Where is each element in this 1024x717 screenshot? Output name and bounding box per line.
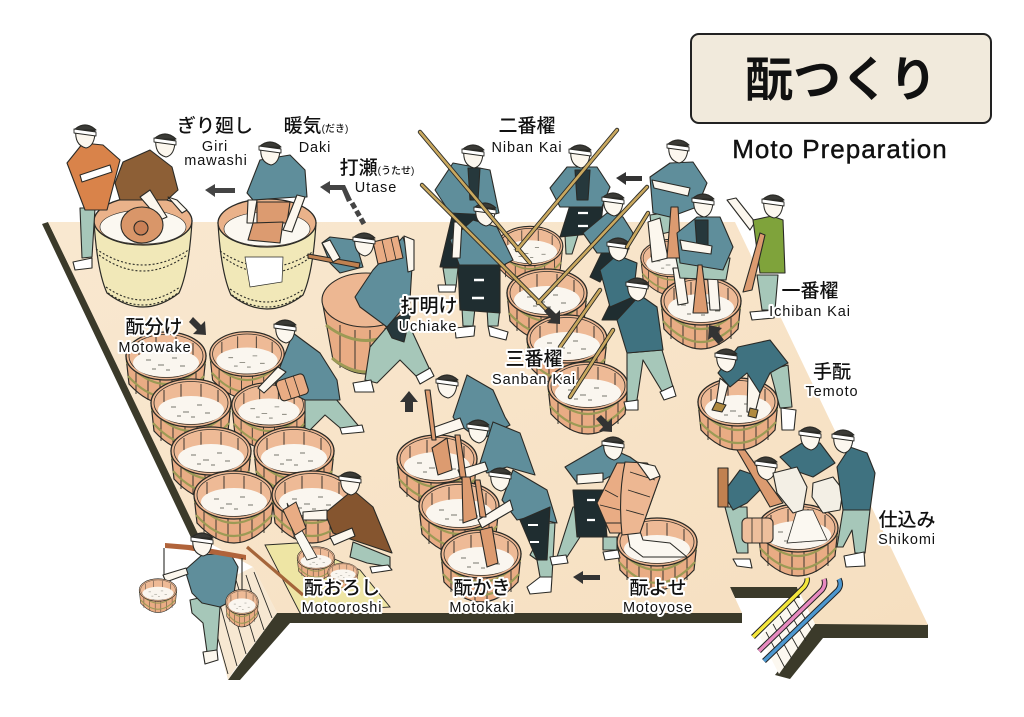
label: Niban Kai: 二番櫂 xyxy=(498,115,556,137)
tub: Uchiake big xyxy=(322,273,410,374)
tilted pail: Utase xyxy=(373,236,403,264)
label: Giri mawashi xyxy=(177,115,253,169)
arrow: Giri mawashi xyxy=(205,184,235,197)
figure: Niban front man xyxy=(450,203,513,340)
subtitle: Moto Preparation xyxy=(732,134,948,164)
tub: Giri mawashi xyxy=(94,197,192,307)
label: Ichiban Kai: Ichiban Kai xyxy=(769,304,851,320)
label: Niban Kai: Niban Kai xyxy=(492,140,562,156)
label: Shikomi: 仕込み xyxy=(878,509,936,531)
label: Motokaki xyxy=(449,577,515,616)
figure: Daki man xyxy=(247,142,307,243)
figure: Motokaki middle man xyxy=(455,420,535,523)
pail: Shikomi xyxy=(742,518,773,543)
label: Motowake: 酛分け xyxy=(125,316,183,338)
figure: Ichiban upper man xyxy=(648,140,707,262)
label: Utase xyxy=(340,157,414,196)
label: Motoyose: 酛よせ xyxy=(629,578,687,599)
label: Motokaki: Motokaki xyxy=(449,600,515,616)
figure: Sanban back man xyxy=(600,238,637,320)
figure: Ichiban seated man xyxy=(673,194,733,313)
label: Temoto: Temoto xyxy=(806,384,858,400)
arrow: Utase xyxy=(320,181,364,224)
wooden vessel in tub: Giri mawashi xyxy=(121,207,163,243)
pail: right bucket xyxy=(226,590,258,627)
label: Motokaki: 酛かき xyxy=(453,577,511,599)
label: Motooroshi xyxy=(302,578,382,616)
label: Uchiake: Uchiake xyxy=(399,319,457,335)
title box: 酛つくり xyxy=(745,54,937,107)
label: Temoto: 手酛 xyxy=(813,361,851,383)
figure: Shikomi right man xyxy=(832,430,875,567)
label: Motowake: Motowake xyxy=(118,340,192,356)
label: Giri mawashi: Giri xyxy=(202,139,228,155)
figure: orange man xyxy=(67,125,120,270)
figure: Niban back man xyxy=(435,145,499,292)
floor platform xyxy=(42,222,928,680)
figure: Utase man xyxy=(308,233,375,273)
label: Motooroshi: 酛おろし xyxy=(304,578,380,599)
arrow: Ichiban to Niban xyxy=(616,172,642,185)
arrow: Sanban to Motoyose xyxy=(596,415,612,432)
label: Shikomi: Shikomi xyxy=(878,532,936,548)
label: Uchiake: 打明け xyxy=(400,295,458,317)
pail: left bucket xyxy=(139,579,177,613)
arrows: coloured flow xyxy=(753,578,840,661)
figure: Uchiake man xyxy=(353,236,434,392)
tilted tub pouring: Motoyose xyxy=(597,462,687,557)
label: Giri mawashi: mawashi xyxy=(184,153,248,169)
figure: Shikomi left man xyxy=(718,450,783,568)
label: Sanban Kai xyxy=(492,348,576,388)
tub: Temoto xyxy=(698,378,778,450)
label: Motoyose xyxy=(623,578,693,616)
figure: Niban right man xyxy=(550,145,610,254)
label: Shikomi xyxy=(878,509,936,548)
figure: Shikomi centre man xyxy=(780,427,835,477)
tubs: Motokaki xyxy=(397,435,521,602)
label: Utase: Utase xyxy=(355,180,397,196)
figure: water carrier xyxy=(163,533,246,664)
figure: green man xyxy=(727,195,785,320)
label: Sanban Kai: 三番櫂 xyxy=(505,348,563,370)
tubs: Niban and Sanban Kai xyxy=(497,226,741,434)
figure: Motokaki upper man xyxy=(425,375,510,475)
figure: Temoto man xyxy=(712,340,796,430)
label: Sanban Kai: Sanban Kai xyxy=(492,372,576,388)
tub: Motoyose xyxy=(617,518,697,590)
label: Motoyose: Motoyose xyxy=(623,600,693,616)
figure: brown man xyxy=(115,134,187,220)
tub: Daki xyxy=(218,199,316,309)
poles: paddles xyxy=(420,130,648,397)
straw mat and vessels: Motooroshi xyxy=(247,502,390,613)
arrow: Uchiake xyxy=(400,391,418,412)
label: Motooroshi: Motooroshi xyxy=(302,600,382,616)
label: Motowake xyxy=(118,316,192,356)
left staircase xyxy=(205,567,277,680)
figure: Motowake man xyxy=(258,320,364,434)
figure: Sanban upper man xyxy=(583,193,633,282)
label: Ichiban Kai xyxy=(769,280,851,320)
tubs: Motowake group xyxy=(126,332,352,543)
label: Temoto xyxy=(806,361,858,400)
label: Daki xyxy=(284,115,348,156)
label: Ichiban Kai: 一番櫂 xyxy=(781,280,839,302)
label: Daki: Daki xyxy=(299,140,331,156)
figure: Motoyose man xyxy=(550,437,637,565)
right staircase xyxy=(760,596,815,674)
label: Uchiake xyxy=(399,295,458,335)
label: Giri mawashi: ぎり廻し xyxy=(177,115,253,137)
steamed rice cloth: Shikomi xyxy=(773,467,843,513)
figure: Motooroshi man xyxy=(303,472,392,573)
label: Utase: 打瀬(うたせ) xyxy=(340,157,414,179)
figure: Sanban lower man xyxy=(617,278,676,410)
pail in hand: Motowake xyxy=(275,373,309,402)
tub: Shikomi xyxy=(758,504,838,576)
arrow: Motoyose xyxy=(573,571,600,584)
label: Niban Kai xyxy=(492,115,562,156)
arrow: Motowake xyxy=(189,317,206,335)
rice flow: Shikomi xyxy=(787,510,827,543)
title box xyxy=(691,34,991,123)
arrow: Temoto xyxy=(708,325,724,344)
figure: Motokaki lower man xyxy=(475,468,557,594)
arrow: Sanban xyxy=(544,307,560,324)
label: Daki: 暖気(だき) xyxy=(284,115,348,137)
